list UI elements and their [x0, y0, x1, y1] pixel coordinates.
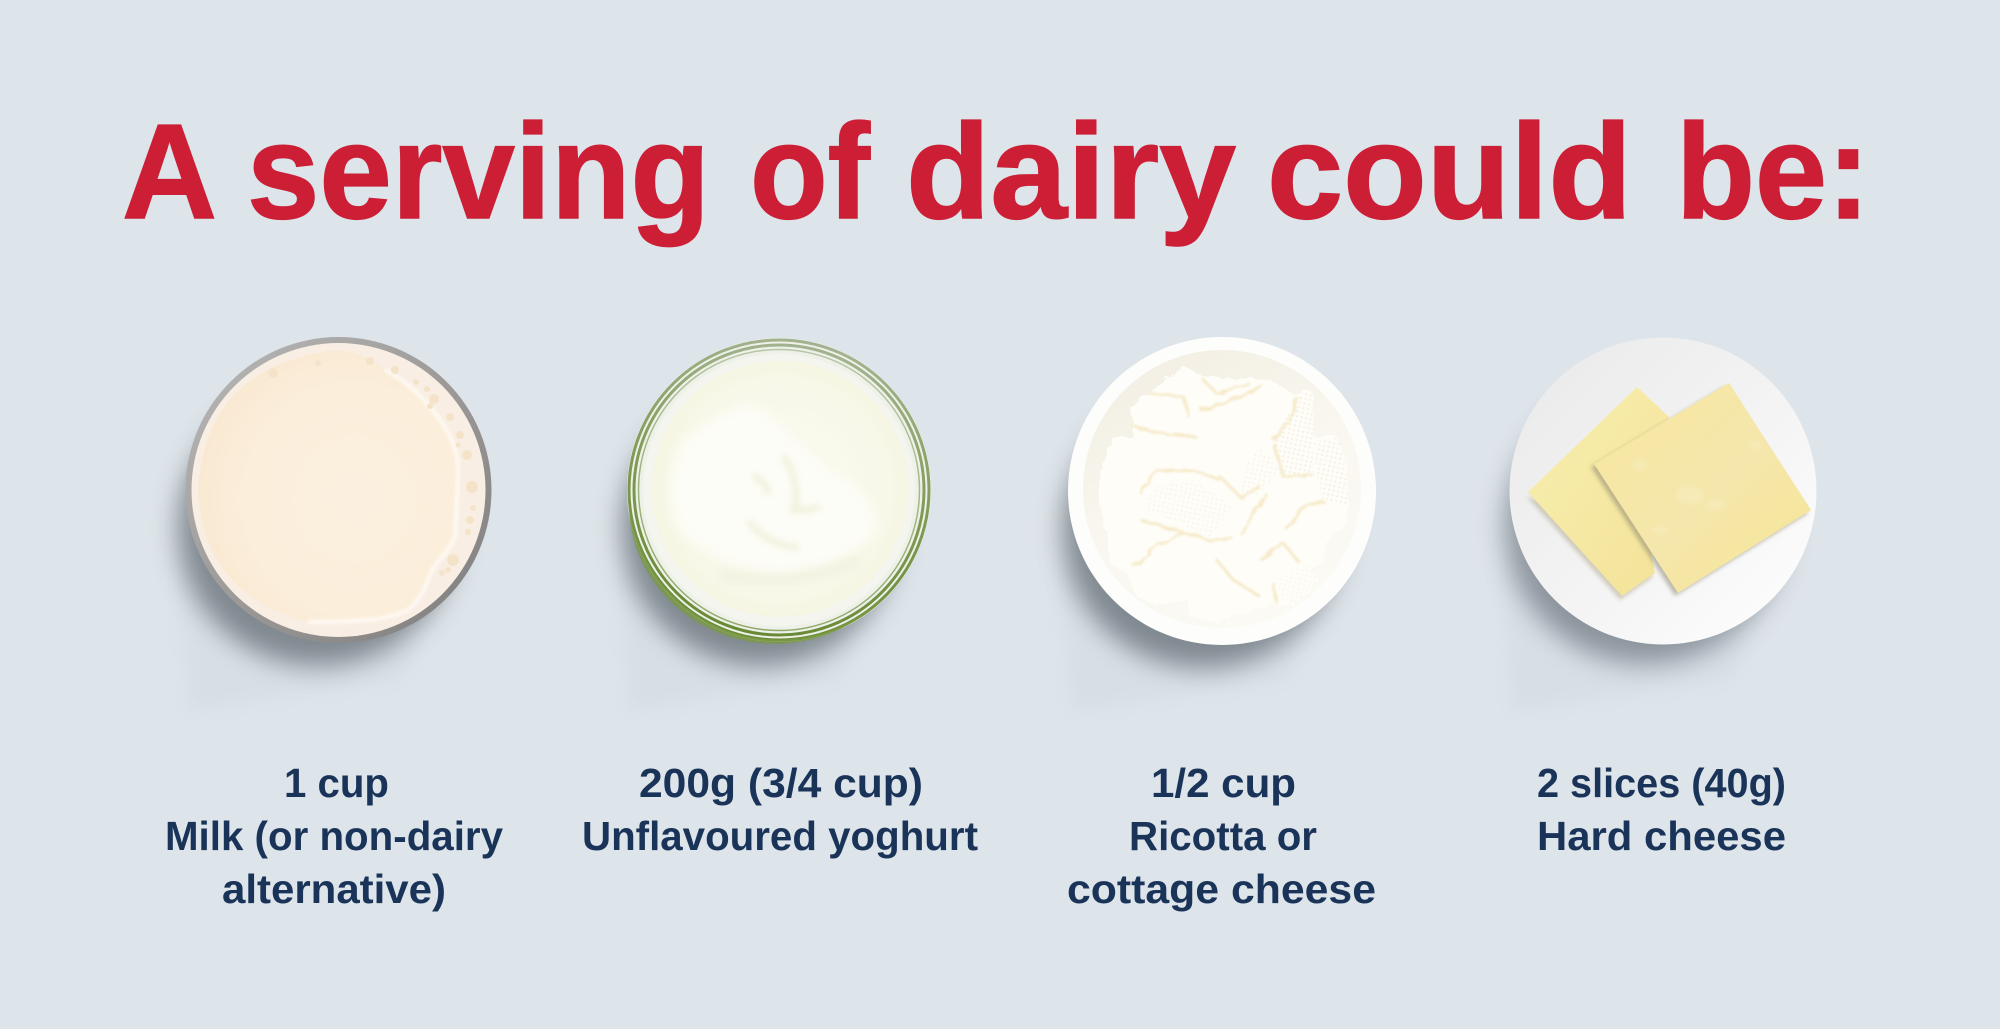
label: yoghurt: Unflavoured yoghurt: [582, 813, 978, 859]
panel: cottage cheese: [1060, 337, 1376, 912]
panel: milk: [165, 337, 503, 912]
title: be:: [1676, 96, 1870, 247]
title: A: [122, 96, 217, 247]
label: cottage cheese: cottage cheese: [1067, 866, 1376, 912]
panel: yoghurt: [582, 338, 978, 859]
label: cottage cheese: Ricotta or: [1129, 813, 1317, 859]
photo: bowl of ricotta: [1060, 337, 1376, 712]
photo: jar of yoghurt: [618, 338, 931, 712]
title: dairy: [906, 96, 1236, 247]
label: milk: alternative): [222, 866, 446, 912]
panel: hard cheese: [1502, 338, 1816, 859]
label: hard cheese: Hard cheese: [1537, 813, 1786, 859]
title: [122, 96, 1870, 247]
label: milk: Milk (or non-dairy: [165, 813, 503, 859]
label: cottage cheese: 1/2 cup: [1151, 760, 1296, 806]
photo: plate of cheese slices: [1502, 338, 1816, 712]
label: cottage cheese: [1067, 760, 1376, 912]
title: could: [1267, 96, 1632, 247]
label: yoghurt: 200g (3/4 cup): [639, 760, 923, 806]
title: of: [750, 96, 871, 247]
label: milk: [165, 760, 503, 912]
label: milk: 1 cup: [284, 760, 389, 806]
label: yoghurt: [582, 760, 978, 859]
label: hard cheese: [1537, 760, 1786, 859]
title: serving: [247, 96, 710, 247]
label: hard cheese: 2 slices (40g): [1537, 760, 1786, 806]
photo: glass of milk: [178, 337, 492, 712]
